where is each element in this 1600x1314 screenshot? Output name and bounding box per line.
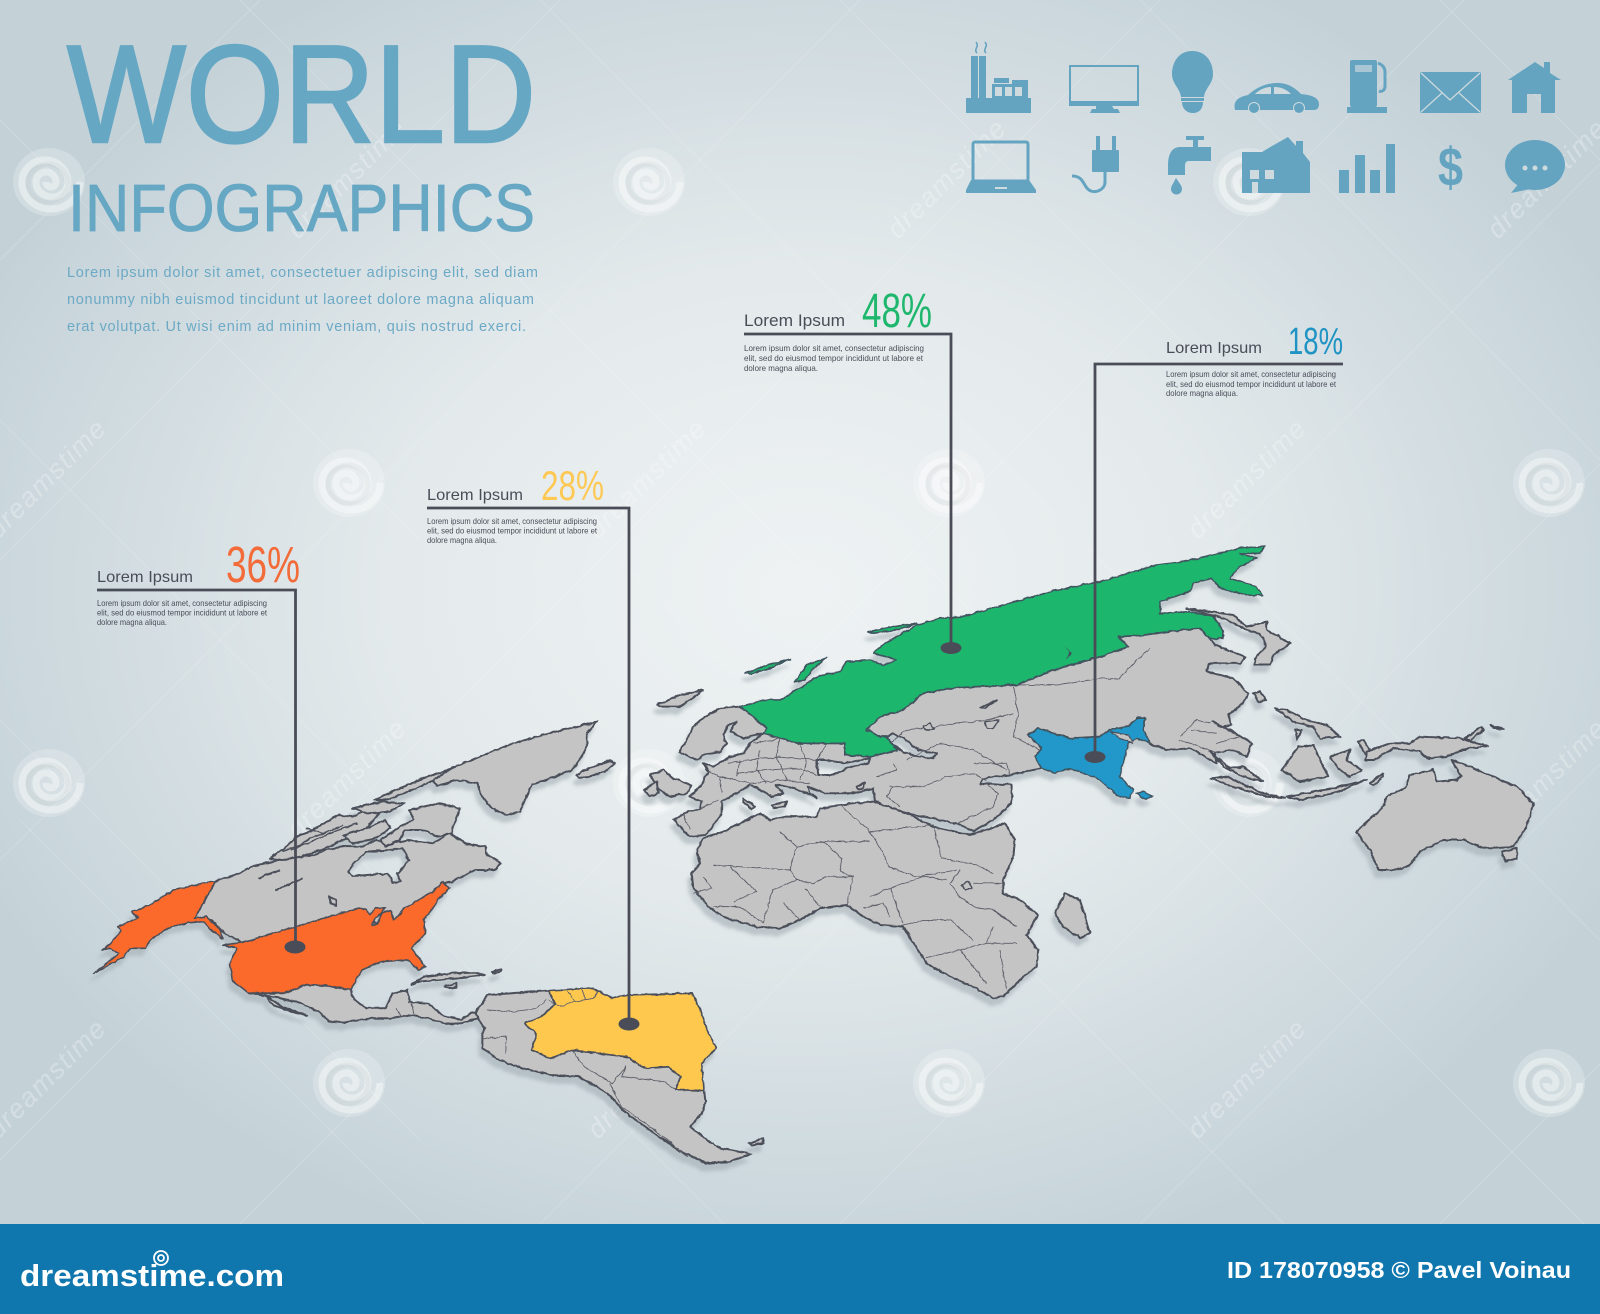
title: INFOGRAPHICS: INFOGRAPHICS xyxy=(68,171,535,246)
callout: 18% xyxy=(1084,321,1343,763)
world map xyxy=(94,546,1533,1163)
Caribbean xyxy=(412,969,501,988)
Brazil xyxy=(525,988,716,1091)
watermark pattern: dreamstime xyxy=(1181,413,1313,544)
watermark pattern: dreamstime xyxy=(581,413,713,544)
intro paragraph: Lorem ipsum dolor sit amet, consectetuer adipiscing elit, sed diam xyxy=(67,265,538,281)
Mediterranean islands xyxy=(743,783,865,809)
icon: car xyxy=(1235,83,1319,114)
New Guinea xyxy=(1365,737,1488,760)
intro paragraph xyxy=(67,265,538,335)
body text xyxy=(744,343,924,373)
heading: Lorem Ipsum xyxy=(97,569,193,586)
leader line xyxy=(744,334,951,646)
Iceland xyxy=(577,761,614,777)
footer logo text: dreamstime.com xyxy=(20,1258,284,1293)
body text xyxy=(1166,369,1337,398)
Mexico and Central America xyxy=(249,985,478,1024)
body text: elit, sed do eiusmod tempor incididunt ut labore et xyxy=(97,608,268,618)
value: 28% xyxy=(541,462,604,509)
intro paragraph: erat volutpat. Ut wisi enim ad minim veniam, quis nostrud exerci. xyxy=(67,319,526,335)
footer credit: ID 178070958 © Pavel Voinau xyxy=(1227,1257,1571,1283)
Europe borders xyxy=(683,738,827,830)
icon: monitor xyxy=(1069,66,1139,113)
India xyxy=(1028,718,1150,798)
Africa borders xyxy=(693,805,1017,990)
icon: laptop xyxy=(966,142,1036,193)
Moluccas xyxy=(1358,740,1372,754)
marker xyxy=(618,1018,640,1030)
intro paragraph: nonummy nibh euismod tincidunt ut laoreet dolore magna aliquam xyxy=(67,292,534,308)
Russia xyxy=(740,546,1265,757)
footer bar xyxy=(0,1224,1600,1314)
callout: 28% xyxy=(427,462,640,1030)
watermark pattern: dreamstime xyxy=(281,713,413,844)
Malay Peninsula xyxy=(1210,752,1263,782)
icon: envelope xyxy=(1420,72,1481,113)
Nepal xyxy=(1110,732,1133,743)
continent: North America xyxy=(94,722,763,1163)
Java and Lesser Sunda xyxy=(1287,780,1367,800)
Sulawesi xyxy=(1330,750,1362,777)
body text xyxy=(427,516,598,545)
Borneo xyxy=(1282,745,1328,782)
body text: Lorem ipsum dolor sit amet, consectetur adipiscing xyxy=(1166,369,1336,379)
Scandinavia xyxy=(679,707,767,760)
Canada xyxy=(194,833,501,943)
Japan xyxy=(1187,608,1290,665)
body text: elit, sed do eiusmod tempor incididunt ut labore et xyxy=(744,353,924,363)
Madagascar xyxy=(1055,893,1090,938)
Falkland Islands xyxy=(749,1138,763,1145)
Solomon Islands xyxy=(1490,725,1503,729)
body text: dolore magna aliqua. xyxy=(97,617,167,627)
USA xyxy=(223,882,449,993)
body text: Lorem ipsum dolor sit amet, consectetur adipiscing xyxy=(97,598,267,608)
icon: fuel pump xyxy=(1347,60,1387,113)
icon: factory xyxy=(966,42,1031,113)
icon: big house xyxy=(1242,137,1310,193)
body text: Lorem ipsum dolor sit amet, consectetur adipiscing xyxy=(744,343,924,353)
marker xyxy=(284,940,306,954)
body text xyxy=(97,598,268,627)
icon: plug xyxy=(1072,136,1119,192)
body text: elit, sed do eiusmod tempor incididunt ut labore et xyxy=(427,526,598,536)
watermark pattern: dreamstime xyxy=(1181,1013,1313,1144)
leader line xyxy=(1095,364,1343,755)
Palawan xyxy=(1295,730,1302,740)
body text: dolore magna aliqua. xyxy=(744,363,818,373)
icon: light bulb xyxy=(1172,51,1213,113)
body text: dolore magna aliqua. xyxy=(1166,388,1238,398)
body text: elit, sed do eiusmod tempor incididunt ut labore et xyxy=(1166,379,1337,389)
Australia xyxy=(1357,760,1533,870)
Greenland xyxy=(433,722,597,815)
value: 48% xyxy=(862,285,932,338)
Asia borders xyxy=(877,648,1240,823)
South America xyxy=(475,991,751,1163)
Tasmania xyxy=(1502,848,1517,862)
Sri Lanka xyxy=(1137,792,1153,799)
marker xyxy=(1084,751,1106,763)
leader line xyxy=(97,590,296,946)
icon: dollar: $ xyxy=(1438,136,1463,198)
Russian Arctic islands xyxy=(745,623,917,682)
body text: Lorem ipsum dolor sit amet, consectetur adipiscing xyxy=(427,516,597,526)
icon: faucet xyxy=(1168,136,1211,194)
icon: house xyxy=(1508,62,1561,113)
Eurasia mainland xyxy=(673,628,1252,837)
South America borders xyxy=(482,989,688,1157)
Svalbard xyxy=(657,690,703,707)
Ireland xyxy=(644,782,658,797)
Philippines xyxy=(1275,708,1340,738)
Arctic archipelago xyxy=(258,768,460,906)
heading: Lorem Ipsum xyxy=(744,311,845,330)
icon: speech bubble xyxy=(1505,140,1565,193)
icon: bar chart xyxy=(1339,144,1395,193)
Africa xyxy=(692,802,1038,998)
title: WORLD: WORLD xyxy=(67,17,536,172)
watermark pattern: dreamstime xyxy=(281,113,413,244)
footer logo spiral xyxy=(154,1251,168,1265)
New Britain xyxy=(1465,727,1483,740)
Timor xyxy=(1370,773,1383,785)
leader line xyxy=(427,508,629,1022)
value: 18% xyxy=(1288,321,1343,363)
Alaska xyxy=(94,881,223,973)
callout: 48% xyxy=(744,285,962,654)
marker xyxy=(940,642,962,654)
body text: dolore magna aliqua. xyxy=(427,535,497,545)
value: 36% xyxy=(226,536,300,593)
Lake Baikal xyxy=(1063,645,1072,660)
Britain xyxy=(650,770,692,797)
watermark pattern: dreamstime xyxy=(881,713,1013,844)
callout: 36% xyxy=(97,536,306,954)
watermark pattern: dreamstime xyxy=(581,1013,713,1144)
Taiwan xyxy=(1253,692,1266,702)
continent: Japan, Southeast Asia, Oceania xyxy=(1187,608,1533,870)
Sumatra xyxy=(1210,777,1285,798)
continent: Europe, Asia, Africa xyxy=(644,546,1265,998)
heading: Lorem Ipsum xyxy=(427,487,523,504)
watermark pattern: dreamstime xyxy=(881,113,1013,244)
heading: Lorem Ipsum xyxy=(1166,340,1262,357)
